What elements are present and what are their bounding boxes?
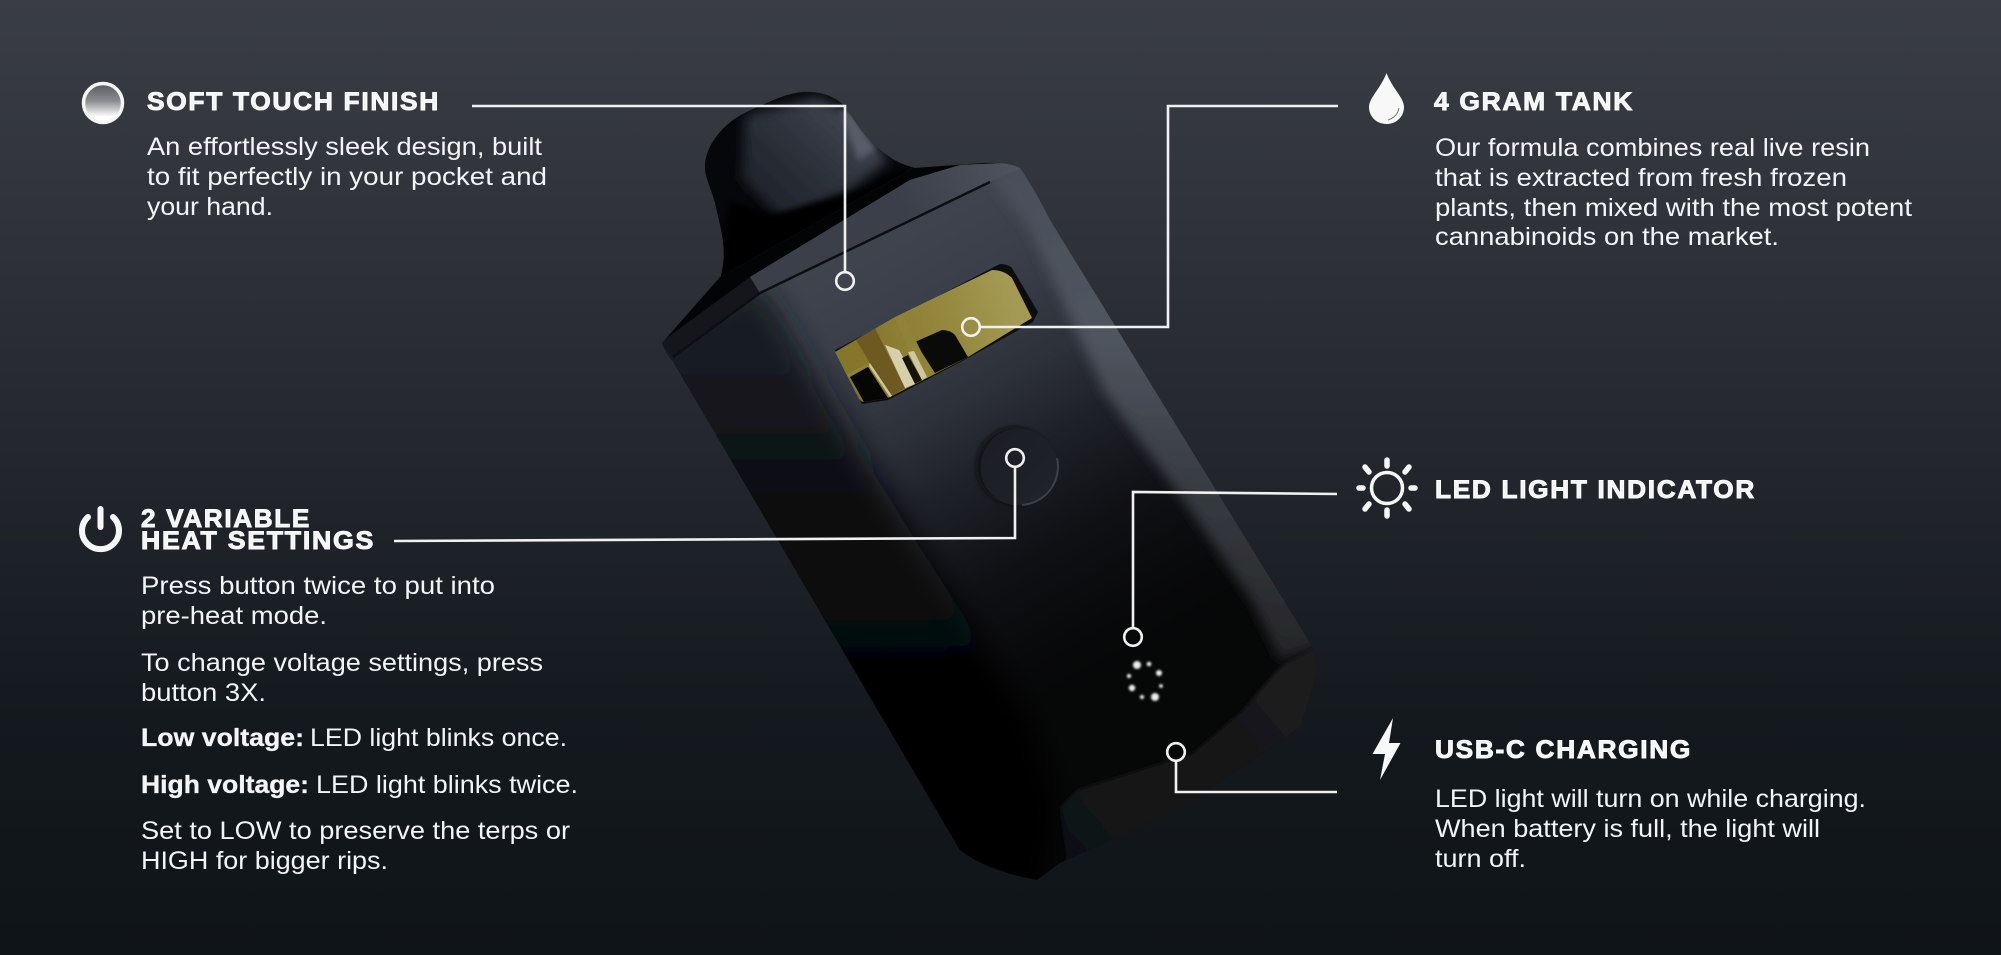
text: heat settings description: To change voltage settings, press xyxy=(141,649,543,677)
power button xyxy=(976,427,1058,506)
text: soft touch description: to fit perfectly in your pocket and xyxy=(147,163,547,191)
leader line: USB xyxy=(1167,743,1337,792)
text: charging description: LED light will turn on while charging. xyxy=(1435,785,1866,813)
leader line: LED xyxy=(1124,492,1337,646)
heading: 4 gram tank: 4 GRAM TANK xyxy=(1434,88,1634,116)
text: heat settings description: High voltage: xyxy=(141,771,309,799)
callout: soft touch finish xyxy=(84,84,854,290)
window frame xyxy=(835,264,1038,404)
text: heat settings description: button 3X. xyxy=(141,679,266,707)
text: charging description xyxy=(1435,785,1866,873)
leader line: tank xyxy=(962,106,1338,336)
text: heat settings description: Press button twice to put into xyxy=(141,572,495,600)
text: charging description: turn off. xyxy=(1435,845,1526,873)
icon: sun xyxy=(1359,460,1415,516)
mouthpiece xyxy=(704,92,914,276)
text: heat settings description: Set to LOW to preserve the terps or xyxy=(141,817,570,845)
device body xyxy=(662,162,1317,880)
callout: 4 gram tank xyxy=(962,73,1912,336)
callout: USB-C charging xyxy=(1167,718,1866,873)
text: tank description: cannabinoids on the market. xyxy=(1435,223,1779,251)
leader line: heat button xyxy=(394,449,1024,541)
heading: USB-C charging: USB-C CHARGING xyxy=(1435,736,1692,764)
icon: power xyxy=(82,509,119,549)
text: charging description: When battery is full, the light will xyxy=(1435,815,1820,843)
text: tank description: plants, then mixed with the most potent xyxy=(1435,194,1912,222)
text: tank description xyxy=(1435,134,1912,251)
text: heat settings description xyxy=(141,572,578,875)
heading: 2 variable heat settings: 2 VARIABLE xyxy=(141,505,311,533)
text: soft touch description: An effortlessly sleek design, built xyxy=(147,133,542,161)
heading: 2 variable heat settings xyxy=(141,505,375,555)
collar seam xyxy=(673,182,990,357)
product: vape device xyxy=(662,92,1317,880)
icon: soft touch orb xyxy=(84,84,122,122)
text: heat settings description: LED light blinks twice. xyxy=(316,771,578,799)
tank window xyxy=(835,270,1032,402)
text: heat settings description: Low voltage: xyxy=(141,724,304,752)
leader line: soft touch xyxy=(472,106,854,290)
LED ring xyxy=(1127,661,1163,701)
text: tank description: Our formula combines real live resin xyxy=(1435,134,1870,162)
text: soft touch description xyxy=(147,133,547,221)
heading: 2 variable heat settings: HEAT SETTINGS xyxy=(141,527,375,555)
text: heat settings description: pre-heat mode. xyxy=(141,602,327,630)
callout: LED light indicator xyxy=(1124,460,1756,646)
callout: 2 variable heat settings xyxy=(82,449,1024,875)
text: tank description: that is extracted from fresh frozen xyxy=(1435,164,1847,192)
icon: droplet xyxy=(1369,73,1404,124)
heading: soft touch finish: SOFT TOUCH FINISH xyxy=(147,88,440,116)
icon: lightning bolt xyxy=(1372,718,1400,780)
text: heat settings description: HIGH for bigger rips. xyxy=(141,847,388,875)
text: soft touch description: your hand. xyxy=(147,193,273,221)
text: heat settings description: LED light blinks once. xyxy=(310,724,567,752)
heading: LED light indicator: LED LIGHT INDICATOR xyxy=(1435,476,1756,504)
